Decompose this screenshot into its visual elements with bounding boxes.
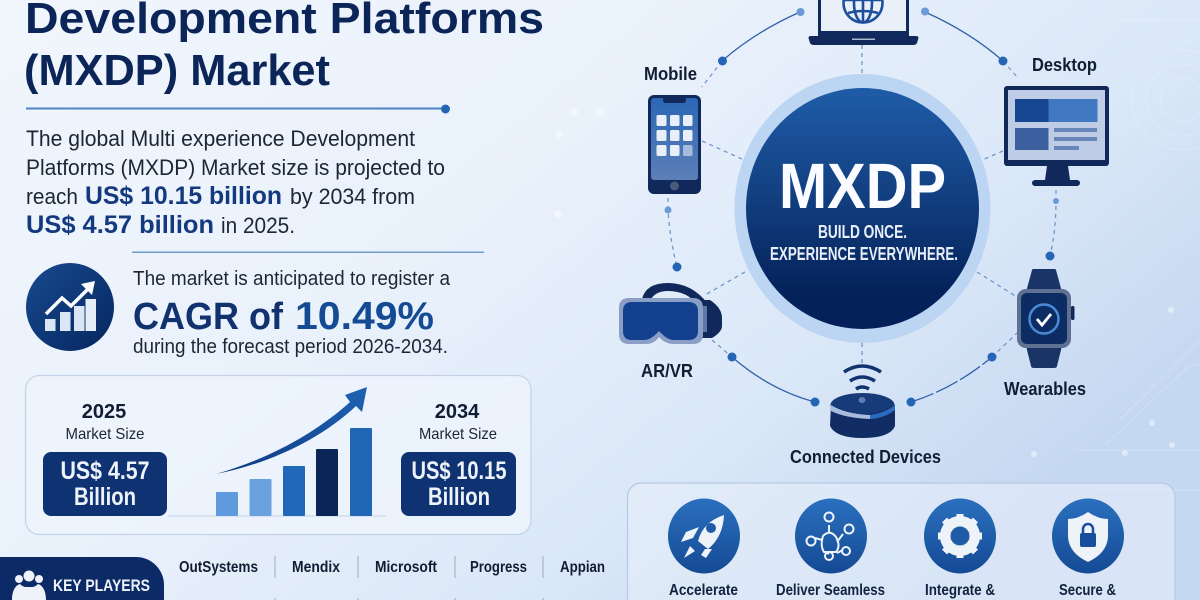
bar chart [168, 428, 386, 516]
icon: people [12, 570, 46, 600]
key players list: Mendix [292, 559, 340, 576]
market size paragraph: by 2034 from [290, 184, 415, 209]
icon: VR headset [619, 283, 722, 381]
icon: smartwatch [1004, 269, 1086, 399]
benefit: integrate [924, 498, 996, 599]
panel: market size comparison [26, 376, 531, 534]
2025 market size [43, 401, 167, 516]
label: Mobile: Mobile [644, 64, 697, 84]
2025 market size: Market Size [66, 426, 145, 443]
label: AR/VR: AR/VR [641, 361, 693, 381]
CAGR text [133, 268, 451, 358]
label: Wearables: Wearables [1004, 379, 1086, 399]
2034 market size: US$ 10.15 [412, 457, 507, 485]
market size paragraph: reach [26, 184, 78, 209]
icon: desktop monitor [1004, 55, 1109, 186]
market size paragraph: The global Multi experience Development [26, 126, 415, 151]
icon: growth chart badge [26, 263, 114, 351]
CAGR text: 10.49% [295, 295, 434, 338]
key players list: Microsoft [375, 559, 438, 576]
benefit: secure: Secure & [1059, 582, 1116, 599]
title: (MXDP) Market [24, 46, 330, 95]
title [24, 0, 544, 95]
benefit: accelerate: Accelerate [669, 582, 738, 599]
2034 market size: Market Size [419, 426, 497, 443]
key players badge: KEY PLAYERS [53, 576, 150, 595]
CAGR text: during the forecast period 2026-2034. [133, 336, 448, 358]
2025 market size: Billion [74, 483, 136, 511]
label: Connected Devices: Connected Devices [790, 447, 941, 467]
benefit: accelerate [668, 498, 740, 599]
icon: smart speaker [790, 366, 941, 467]
central MXDP hub [734, 74, 990, 343]
market size paragraph: in 2025. [221, 213, 295, 238]
2034 market size: Billion [428, 483, 490, 511]
benefit: integrate: Integrate & [925, 582, 995, 599]
panel: benefits [628, 483, 1175, 600]
icon: globe [844, 0, 882, 22]
key players list: Appian [560, 559, 605, 576]
arrow: growth trend [216, 387, 367, 474]
2034 market size [401, 401, 516, 516]
icon: laptop [808, 0, 918, 45]
2025 market size: 2025 [82, 401, 126, 423]
label: Desktop: Desktop [1032, 55, 1097, 75]
benefit: deliver seamless: Deliver Seamless [776, 582, 885, 599]
icon: mobile phone [644, 64, 701, 194]
central MXDP hub: EXPERIENCE EVERYWHERE. [770, 244, 958, 264]
CAGR text: CAGR of [133, 296, 283, 338]
market size paragraph: US$ 10.15 billion [85, 182, 282, 210]
2034 market size: 2034 [435, 401, 480, 423]
benefit: secure [1052, 498, 1124, 599]
key players list: Progress [470, 559, 527, 576]
central MXDP hub: MXDP [779, 150, 946, 222]
central MXDP hub: BUILD ONCE. [818, 222, 907, 242]
market size paragraph [26, 126, 445, 239]
benefit: deliver seamless [776, 498, 885, 599]
market size paragraph: Platforms (MXDP) Market size is projected to [26, 155, 445, 180]
key players list [179, 556, 605, 600]
CAGR text: The market is anticipated to register a [133, 268, 451, 290]
key players badge [0, 557, 164, 600]
2025 market size: US$ 4.57 [60, 457, 150, 485]
key players list: OutSystems [179, 559, 258, 576]
connection ring [664, 8, 1059, 406]
title underline [26, 104, 450, 114]
market size paragraph: US$ 4.57 billion [26, 211, 214, 239]
